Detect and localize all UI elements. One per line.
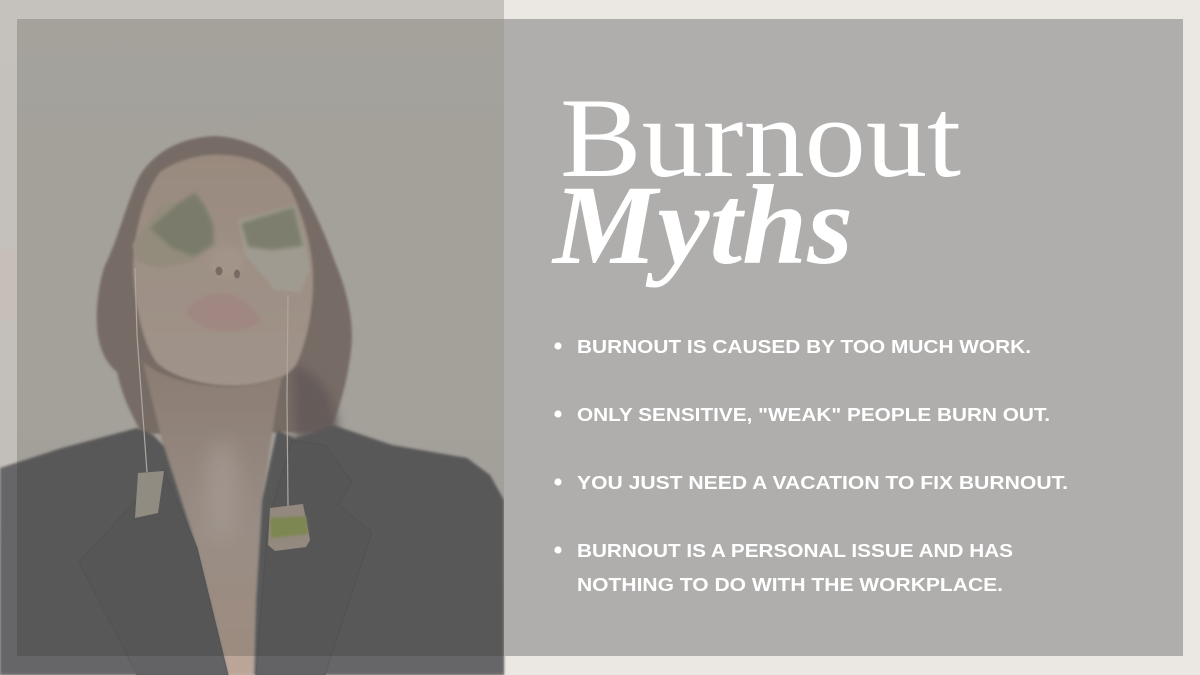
blazer <box>0 425 504 675</box>
tea bag strings <box>135 268 288 506</box>
lapel left <box>79 470 228 675</box>
photo: woman with tea bags over her eyes <box>0 0 504 675</box>
left tag <box>135 471 164 518</box>
title line: Myths: Myths <box>551 163 853 288</box>
myth 4 <box>554 541 1013 595</box>
bullet list: burnout myths <box>554 337 1068 595</box>
nostrils <box>216 266 222 276</box>
myth 1: BURNOUT IS CAUSED BY TOO MUCH WORK. <box>577 337 1031 357</box>
panel: photo overlay <box>17 19 504 656</box>
wall highlight at left edge <box>0 250 17 320</box>
hair <box>97 136 352 434</box>
face <box>133 155 313 386</box>
lapel right <box>256 440 372 675</box>
title <box>551 76 961 288</box>
myth 3: YOU JUST NEED A VACATION TO FIX BURNOUT. <box>577 473 1068 493</box>
right tea bag <box>238 205 310 292</box>
nose <box>209 245 245 279</box>
panel: text background <box>504 19 1183 656</box>
lips <box>185 293 262 331</box>
neck highlight <box>206 440 238 540</box>
right tag <box>268 504 310 551</box>
myth 4: BURNOUT IS A PERSONAL ISSUE AND HAS <box>577 541 1013 561</box>
left tea bag <box>132 191 215 268</box>
wall <box>0 0 504 675</box>
myth 2: ONLY SENSITIVE, "WEAK" PEOPLE BURN OUT. <box>577 405 1050 425</box>
neck and chest <box>143 362 282 675</box>
title line: Burnout: Burnout <box>560 76 961 201</box>
myth 4: NOTHING TO DO WITH THE WORKPLACE. <box>577 575 1003 595</box>
loose hair at neck <box>292 365 338 440</box>
